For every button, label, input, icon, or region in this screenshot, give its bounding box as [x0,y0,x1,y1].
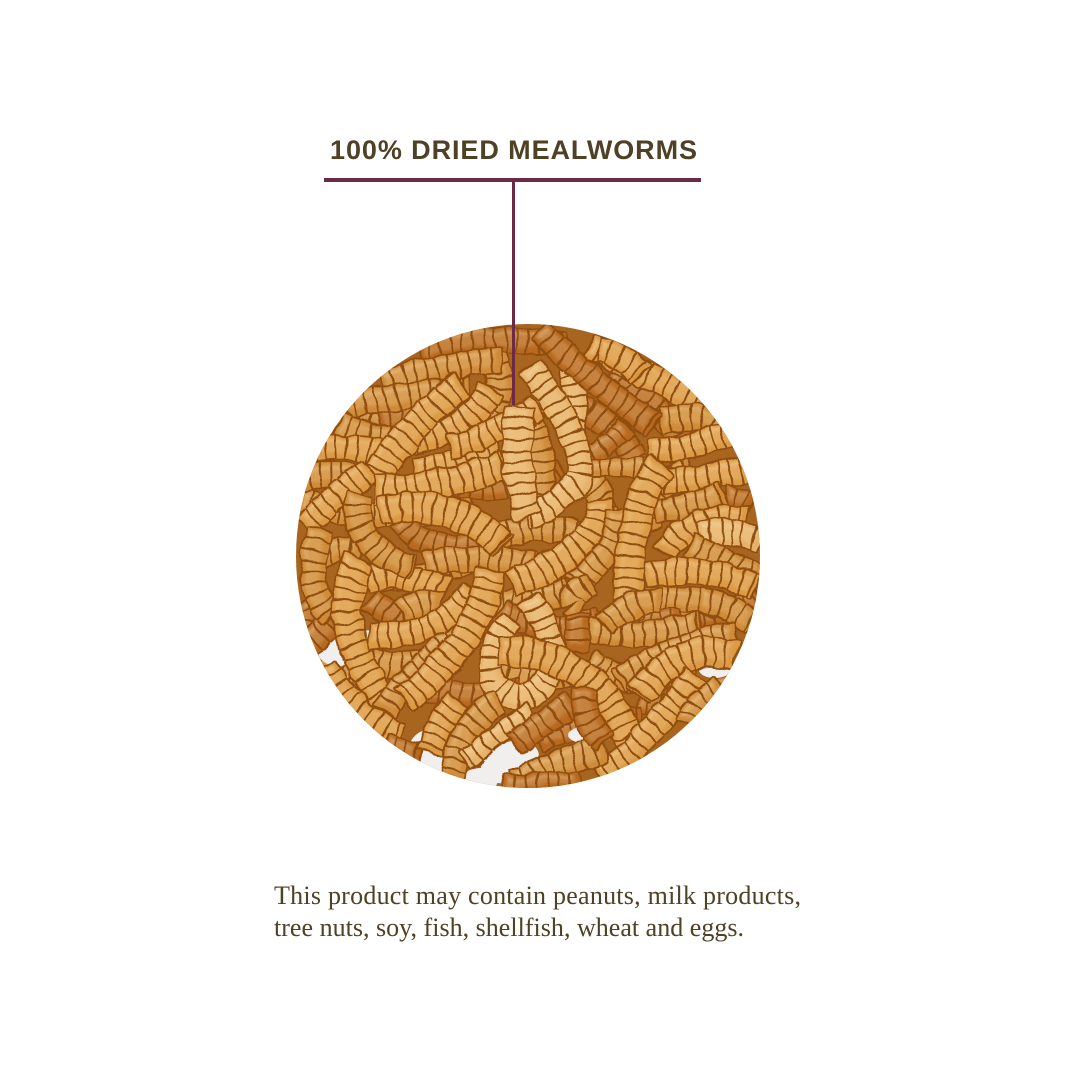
white surface patches [318,359,731,792]
connector line [512,182,515,405]
photo: dried mealworms in circle [290,320,770,800]
allergen note [274,881,801,942]
allergen note: This product may contain peanuts, milk products, [274,881,801,910]
allergen note: tree nuts, soy, fish, shellfish, wheat and eggs. [274,913,744,942]
title: 100% DRIED MEALWORMS [330,135,697,165]
title underline [324,178,701,182]
